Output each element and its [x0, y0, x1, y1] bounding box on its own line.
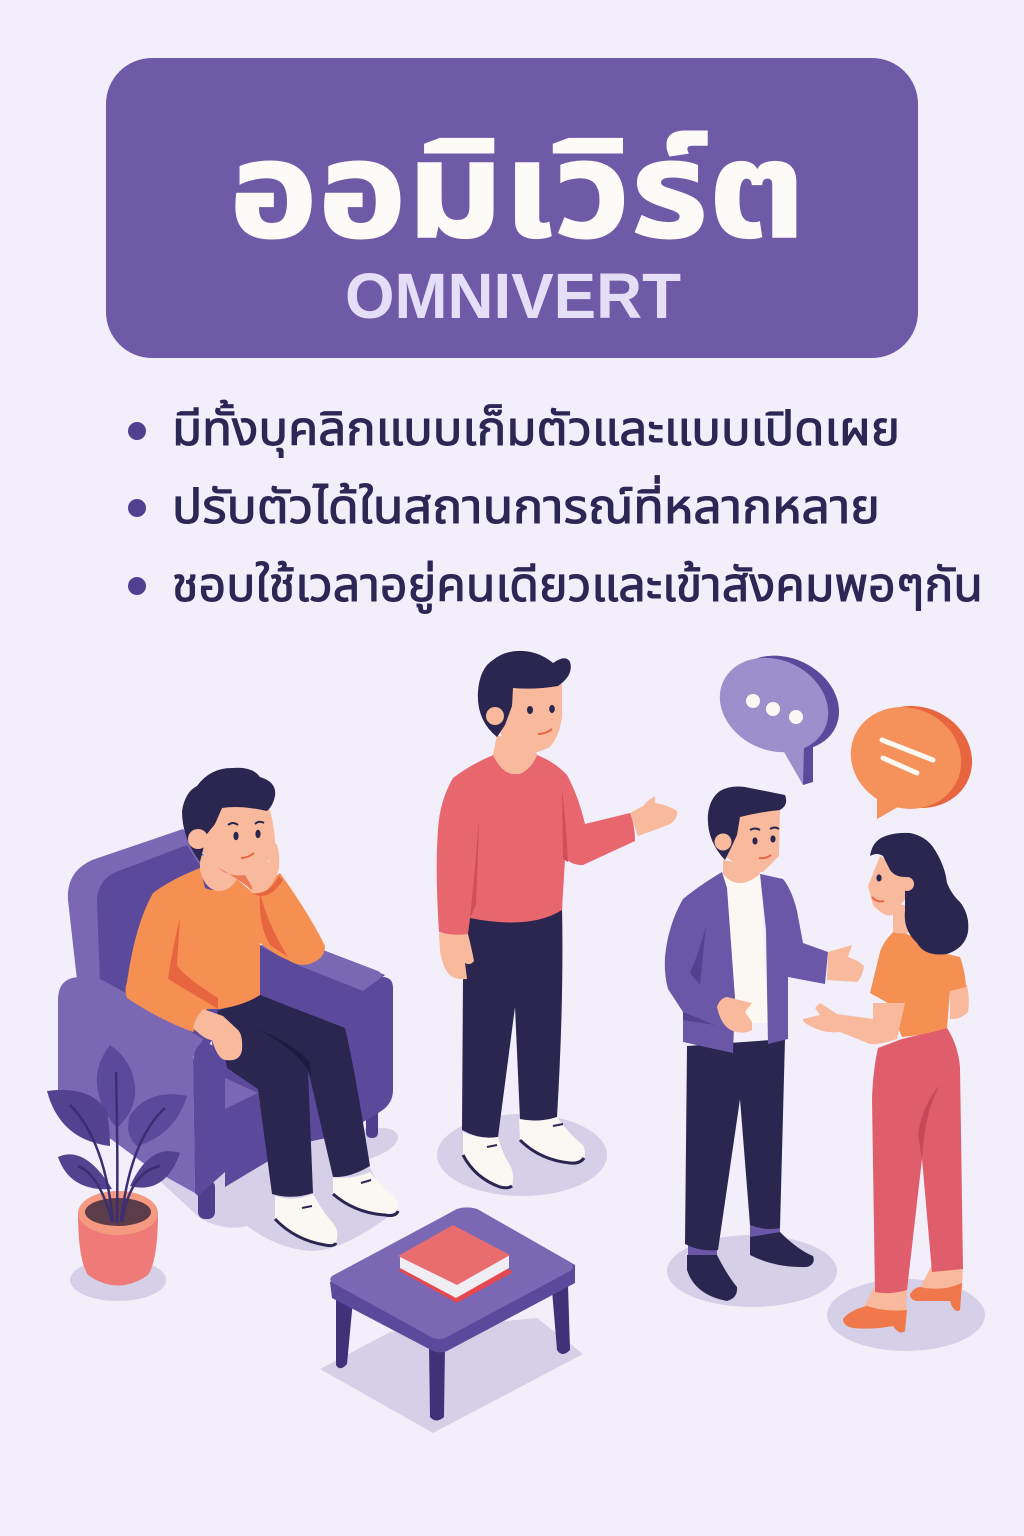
bubble side [713, 638, 855, 785]
pants [685, 1039, 785, 1250]
neck [200, 855, 250, 891]
illustration: coffee table with book [320, 1208, 583, 1433]
bubble side [844, 689, 988, 825]
pants [462, 905, 562, 1138]
bullet 2: ปรับตัวได้ในสถานการณ์ที่หลากหลาย [172, 475, 880, 533]
table legs [336, 1285, 570, 1420]
feet [860, 1265, 963, 1315]
pants [217, 995, 370, 1197]
title background [106, 58, 918, 358]
hand cuff [253, 876, 283, 896]
head [182, 768, 275, 875]
illustration: potted plant [47, 1045, 187, 1301]
shoes [463, 1117, 585, 1188]
back arm [950, 985, 969, 1019]
pants fold [918, 1085, 940, 1159]
pot [78, 1212, 158, 1286]
shoes [687, 1232, 814, 1301]
floor shadow [827, 1279, 985, 1351]
bullet 3: ชอบใช้เวลาอยู่คนเดียวและเข้าสังคมพอๆกัน [172, 558, 983, 613]
chin shadow [212, 862, 255, 892]
bullet 1: มีทั้งบุคลิกแบบเก็มตัวและแบบเปิดเผย [172, 400, 900, 457]
bubble lines [882, 740, 933, 773]
pants crease [258, 1029, 311, 1076]
hand on cheek [252, 843, 279, 893]
sweater [437, 755, 635, 935]
illustration: standing man in pink sweater [437, 651, 677, 1196]
title: Thai: ออมิเวิร์ต [229, 115, 806, 266]
top [870, 929, 966, 1037]
under-chin patch [232, 862, 272, 893]
floor shadow [437, 1114, 607, 1196]
floor shadow [150, 1128, 398, 1251]
pot shadow [70, 1259, 166, 1301]
bullet list [128, 400, 983, 613]
table top [330, 1208, 575, 1352]
right hand [630, 797, 677, 836]
illustration: seated man in armchair [58, 768, 398, 1251]
shoes [843, 1283, 962, 1333]
floor shadow [667, 1235, 837, 1307]
speech bubble: purple [704, 638, 855, 785]
hand on armrest [193, 1009, 242, 1060]
left hand [439, 933, 474, 979]
jacket [665, 872, 828, 1053]
head and hair [868, 833, 968, 955]
sweater folds [470, 790, 568, 918]
speech bubble: orange [835, 689, 988, 825]
book [398, 1225, 513, 1303]
head [708, 786, 786, 883]
sweater [126, 868, 325, 1032]
title panel [106, 58, 918, 358]
armchair [58, 829, 393, 1219]
pants [872, 1028, 963, 1293]
bubble front [835, 691, 977, 825]
hands [717, 945, 864, 1033]
bubble dots [746, 694, 803, 724]
illustration: woman in orange top [803, 833, 985, 1351]
table shadow [320, 1318, 583, 1433]
sweater folds [168, 893, 288, 1009]
illustration: man in purple jacket [665, 786, 864, 1307]
subtitle: English: OMNIVERT [345, 260, 681, 332]
shoes [275, 1172, 398, 1246]
socks [688, 1225, 780, 1260]
bubble front [704, 641, 844, 785]
leaves [47, 1045, 187, 1223]
shirt [723, 874, 768, 1023]
head [478, 651, 571, 774]
front arm [803, 1003, 905, 1044]
